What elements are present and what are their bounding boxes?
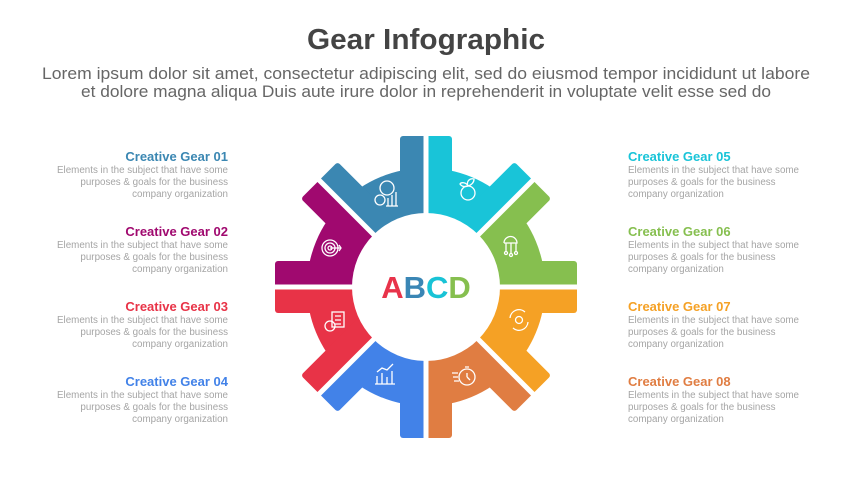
- icons: [322, 179, 528, 385]
- item: Creative Gear 05: [628, 149, 800, 200]
- item: Creative Gear 04: Elements in the subject that have some: [57, 390, 229, 401]
- subtitle: [42, 64, 810, 101]
- icon: plant globe: [460, 179, 475, 200]
- item: Creative Gear 02: company organization: [132, 264, 228, 275]
- item: Creative Gear 04: Creative Gear 04: [125, 374, 229, 389]
- item: Creative Gear 08: company organization: [628, 414, 724, 425]
- icon: cycle: [510, 310, 528, 330]
- item: Creative Gear 03: company organization: [132, 339, 228, 350]
- item: Creative Gear 04: [57, 374, 229, 425]
- icon: target: [322, 240, 341, 256]
- item: Creative Gear 02: purposes & goals for the business: [80, 252, 228, 263]
- item: Creative Gear 01: Creative Gear 01: [125, 149, 228, 164]
- item: Creative Gear 05: Elements in the subject that have some: [628, 165, 800, 176]
- item: Creative Gear 05: Creative Gear 05: [628, 149, 731, 164]
- item: Creative Gear 02: [57, 224, 229, 275]
- icon: clipboard dollar: [325, 312, 344, 331]
- icon: network: [504, 237, 518, 256]
- item: Creative Gear 02: Creative Gear 02: [125, 224, 228, 239]
- icon: bar chart: [375, 364, 395, 384]
- center label ABCD: ABCD: [381, 270, 471, 305]
- item: Creative Gear 08: Creative Gear 08: [628, 374, 731, 389]
- item: Creative Gear 06: Elements in the subject that have some: [628, 240, 800, 251]
- icon: stopwatch: [452, 367, 475, 385]
- item: Creative Gear 04: company organization: [132, 414, 228, 425]
- item: Creative Gear 07: Creative Gear 07: [628, 299, 731, 314]
- item: Creative Gear 03: purposes & goals for the business: [80, 327, 228, 338]
- right items: [628, 149, 800, 425]
- item: Creative Gear 07: purposes & goals for the business: [628, 327, 776, 338]
- item: Creative Gear 01: purposes & goals for the business: [80, 177, 228, 188]
- item: Creative Gear 08: [628, 374, 800, 425]
- item: Creative Gear 06: Creative Gear 06: [628, 224, 731, 239]
- item: Creative Gear 01: [57, 149, 229, 200]
- item: Creative Gear 04: purposes & goals for the business: [80, 402, 228, 413]
- item: Creative Gear 02: Elements in the subject that have some: [57, 240, 229, 251]
- subtitle: Lorem ipsum dolor sit amet, consectetur adipiscing elit, sed do eiusmod tempor incididunt ut labore: [42, 64, 810, 83]
- item: Creative Gear 06: company organization: [628, 264, 724, 275]
- item: Creative Gear 08: purposes & goals for the business: [628, 402, 776, 413]
- item: Creative Gear 01: company organization: [132, 189, 228, 200]
- item: Creative Gear 05: purposes & goals for the business: [628, 177, 776, 188]
- item: Creative Gear 03: Elements in the subject that have some: [57, 315, 229, 326]
- item: Creative Gear 06: purposes & goals for the business: [628, 252, 776, 263]
- subtitle: et dolore magna aliqua Duis aute irure dolor in reprehenderit in voluptate velit esse sed do: [81, 82, 771, 101]
- icon: globe money chart: [375, 181, 398, 206]
- item: Creative Gear 07: Elements in the subject that have some: [628, 315, 800, 326]
- item: Creative Gear 03: [57, 299, 229, 350]
- item: Creative Gear 07: company organization: [628, 339, 724, 350]
- item: Creative Gear 05: company organization: [628, 189, 724, 200]
- title: Gear Infographic: [307, 24, 545, 56]
- item: Creative Gear 08: Elements in the subject that have some: [628, 390, 800, 401]
- item: Creative Gear 01: Elements in the subject that have some: [57, 165, 229, 176]
- item: Creative Gear 06: [628, 224, 800, 275]
- item: Creative Gear 07: [628, 299, 800, 350]
- left items: [57, 149, 229, 425]
- item: Creative Gear 03: Creative Gear 03: [125, 299, 228, 314]
- gear diagram: [275, 136, 577, 438]
